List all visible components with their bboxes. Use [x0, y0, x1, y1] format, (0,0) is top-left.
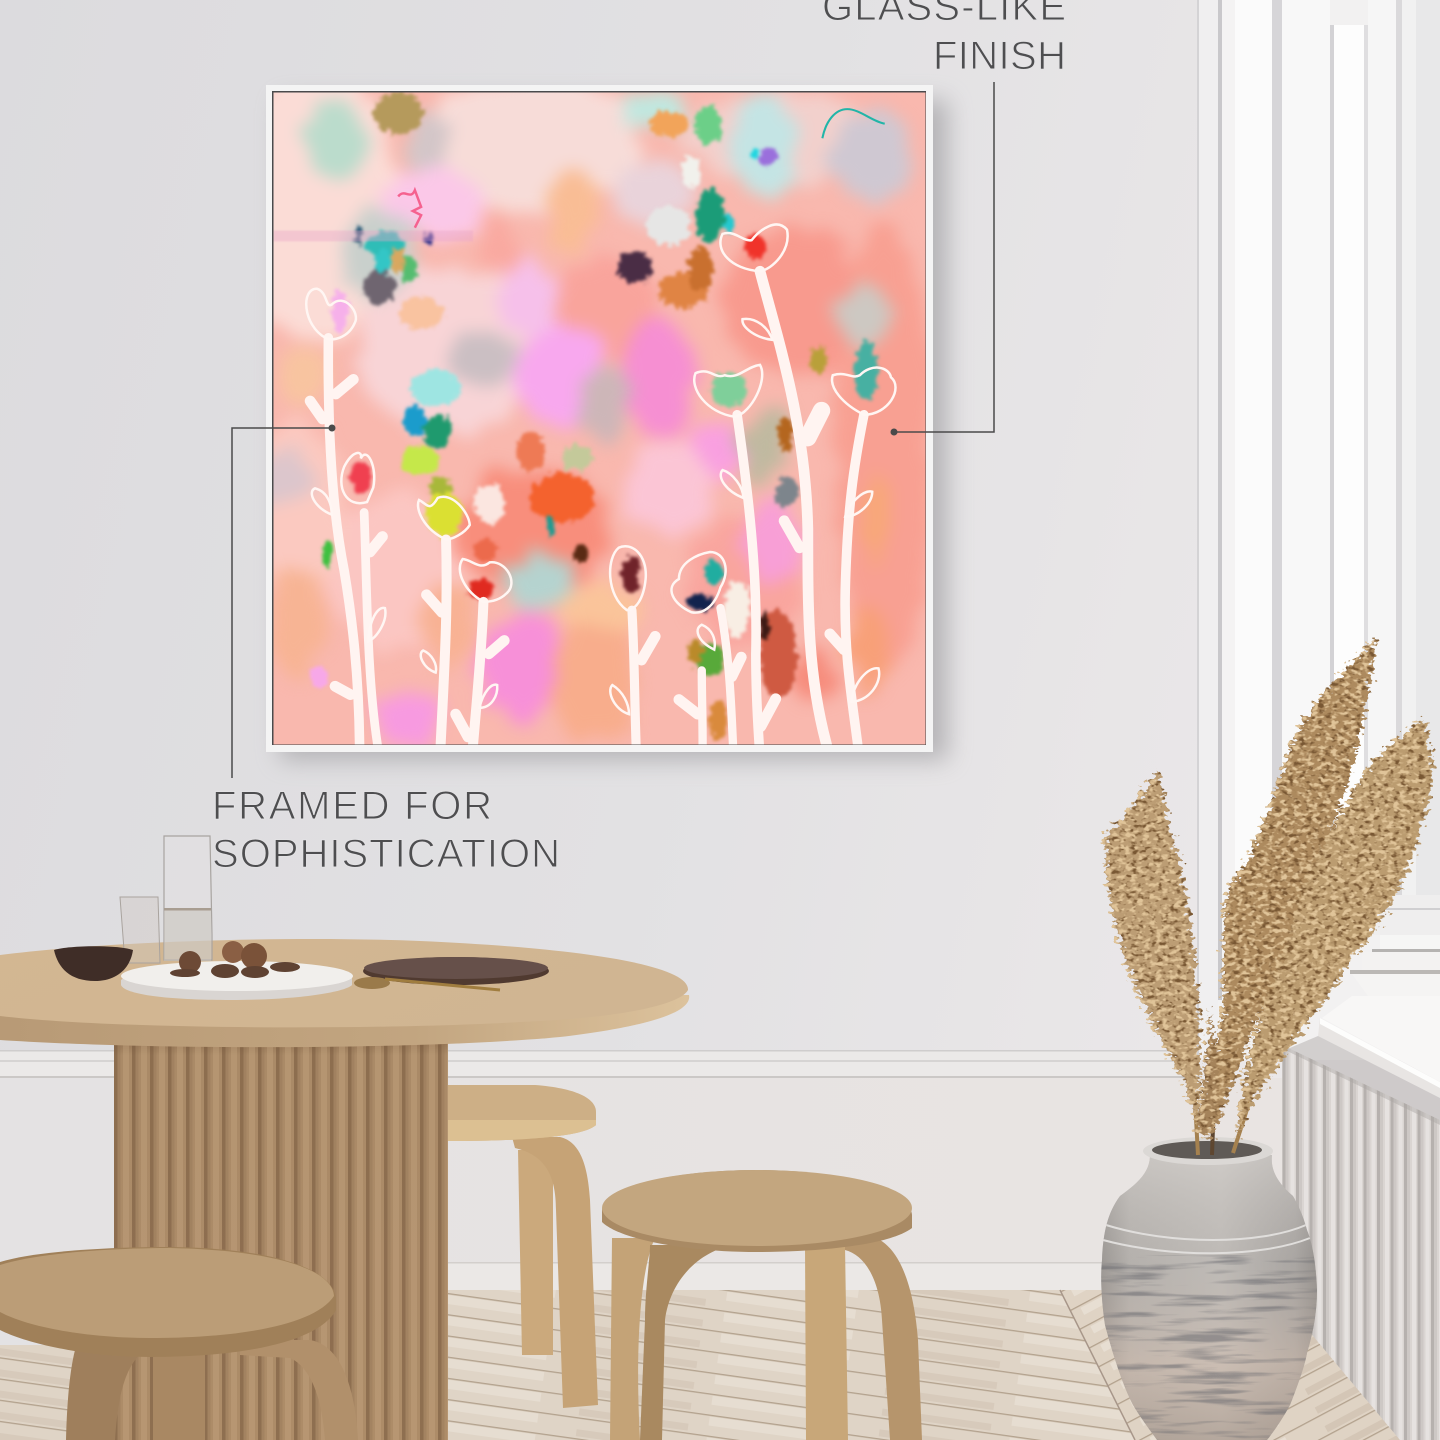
callout heading: FRAMED FOR: [212, 784, 492, 828]
stool bent leg right: [240, 1340, 358, 1440]
table top edge: [0, 995, 689, 1047]
table top surface: [0, 939, 688, 1027]
brass spoons: [354, 977, 500, 990]
dark bowl: [54, 946, 133, 981]
white leaves: [310, 379, 844, 737]
fluted pedestal: [114, 1035, 448, 1440]
dining table: [0, 836, 689, 1440]
floor: [0, 1290, 1400, 1440]
stool bent leg right: [845, 1240, 922, 1440]
window sill: [1285, 996, 1440, 1125]
vase mouth: [1152, 1141, 1262, 1159]
stool leg left: [610, 1238, 655, 1440]
front left stool: [0, 1247, 358, 1440]
callout heading: [822, 0, 1066, 78]
stool seat: [447, 1085, 596, 1141]
books on sill: [1350, 935, 1440, 996]
pampas stems: [1195, 1100, 1250, 1155]
wooden plate: [363, 957, 549, 985]
teal line scribble: [822, 109, 885, 138]
leader dot: [328, 424, 336, 432]
plume: left: [1105, 769, 1200, 1122]
plume: right: [1237, 719, 1433, 1138]
window reflection bar: [274, 231, 473, 241]
stool leg right: [805, 1245, 848, 1440]
vase rim: [1143, 1137, 1273, 1165]
white frame: [266, 85, 933, 752]
chair rail moulding: [0, 1050, 1200, 1078]
callout: framed for sophistication: [212, 424, 560, 876]
radiator: [1282, 1045, 1440, 1440]
stool seat: [602, 1170, 912, 1252]
front right stool: [602, 1170, 922, 1440]
outlined flowers and leaves: [306, 224, 896, 714]
ceramic vase: [1095, 1135, 1325, 1440]
stool seat: [0, 1247, 336, 1357]
stool leg centre: [153, 1350, 205, 1440]
back stool: [447, 1085, 598, 1408]
nuts on platter: [170, 941, 300, 978]
window frame: [1197, 0, 1440, 1060]
white stems: [328, 271, 864, 744]
bright paint marks: [311, 92, 878, 740]
callout heading: [212, 784, 560, 876]
plume: centre: [1207, 636, 1377, 1130]
baseboard: [0, 1262, 1120, 1292]
marble platter: [121, 961, 353, 1000]
colour washes: [274, 92, 926, 744]
plume: short centre: [1195, 1010, 1217, 1140]
frame inner line: [272, 91, 926, 745]
pink scribble: [398, 190, 421, 228]
abstract floral canvas: [274, 92, 926, 744]
glass carafe: [164, 836, 212, 961]
leader line: [893, 82, 994, 432]
glass tumbler: [120, 897, 160, 963]
callout: glass-like finish: [822, 0, 1066, 436]
framed painting: [232, 59, 935, 752]
lower wall panel: [0, 1078, 1285, 1293]
leader line: [232, 428, 332, 778]
stool bent leg: [512, 1137, 598, 1408]
stool bent leg left: [66, 1350, 145, 1440]
callout heading: SOPHISTICATION: [212, 832, 560, 876]
stool bent leg: [640, 1245, 735, 1440]
pampas plumes: [1105, 636, 1433, 1140]
callout heading: FINISH: [933, 34, 1066, 78]
leader dot: [890, 428, 898, 436]
stool leg: [518, 1150, 553, 1355]
painting shadow: [280, 100, 948, 760]
